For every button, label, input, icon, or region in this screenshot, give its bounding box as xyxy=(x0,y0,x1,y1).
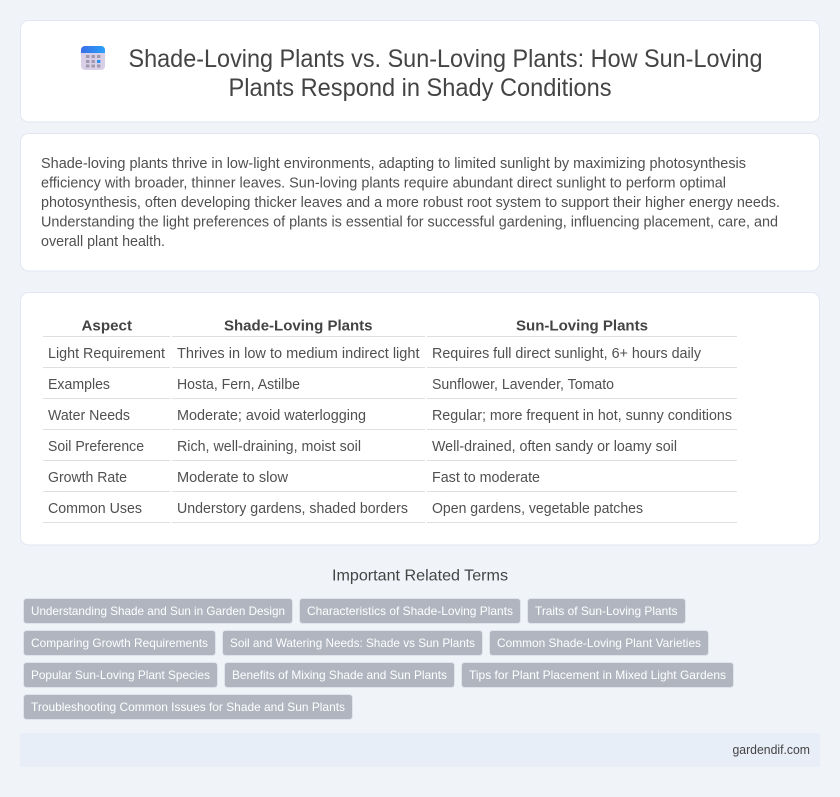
title: Plants Respond in Shady Conditions xyxy=(228,74,612,102)
tag xyxy=(24,694,352,720)
table row: examples: Hosta, Fern, Astilbe xyxy=(177,377,300,393)
tag xyxy=(490,630,708,656)
text block: intro paragraph: efficiency with broader, thinner leaves. Sun-loving plants require abundant direct sunlight to perform optimal xyxy=(41,176,726,192)
title xyxy=(128,45,762,102)
text block: intro paragraph: Shade-loving plants thrive in low-light environments, adapting to limited sunlight by maximizing photosynthesis xyxy=(41,156,746,172)
footer xyxy=(20,733,820,767)
tag xyxy=(528,598,686,624)
tag: Tips for Plant Placement in Mixed Light Gardens xyxy=(469,668,726,682)
tag list: related terms xyxy=(24,598,734,720)
table row: examples xyxy=(48,377,614,393)
table row: common uses: Common Uses xyxy=(48,501,142,517)
icon: calendar xyxy=(81,46,105,70)
table row: soil preference xyxy=(48,439,677,455)
text block: intro paragraph xyxy=(41,156,780,250)
table row: water needs: Water Needs xyxy=(48,408,130,424)
panel: title header xyxy=(20,20,820,122)
table row: water needs: Moderate; avoid waterlogging xyxy=(177,408,366,424)
tag xyxy=(462,662,734,688)
table row: water needs xyxy=(48,408,732,424)
tag xyxy=(24,630,216,656)
tag xyxy=(224,662,454,688)
footer source text: gardendif.com xyxy=(732,743,810,757)
table row: growth rate: Moderate to slow xyxy=(177,470,289,486)
table row: examples: Examples xyxy=(48,377,110,393)
table row: soil preference: Rich, well-draining, moist soil xyxy=(177,439,361,455)
tag xyxy=(300,598,520,624)
table row: soil preference: Soil Preference xyxy=(48,439,144,455)
tag xyxy=(222,630,482,656)
table row: growth rate: Growth Rate xyxy=(48,470,127,486)
tag: Characteristics of Shade-Loving Plants xyxy=(307,604,513,618)
table row: light requirement: Light Requirement xyxy=(48,346,165,362)
tag: Troubleshooting Common Issues for Shade and Sun Plants xyxy=(31,700,345,714)
text block: intro paragraph: Understanding the light preferences of plants is essential for successful gardening, influencing placement, care, and xyxy=(41,214,778,230)
heading: important related terms: Important Related Terms xyxy=(332,568,508,584)
tag: Benefits of Mixing Shade and Sun Plants xyxy=(232,668,447,682)
table row: water needs: Regular; more frequent in hot, sunny conditions xyxy=(432,408,732,424)
title: Shade-Loving Plants vs. Sun-Loving Plants: How Sun-Loving xyxy=(128,45,762,73)
table row: growth rate xyxy=(48,470,540,486)
table row: soil preference: Well-drained, often sandy or loamy soil xyxy=(432,439,677,455)
table header row: Shade-Loving Plants xyxy=(224,318,372,334)
tag: Traits of Sun-Loving Plants xyxy=(535,604,678,618)
panel: introduction xyxy=(20,134,820,271)
table row: light requirement xyxy=(48,346,702,362)
tag xyxy=(24,598,292,624)
table row: common uses: Understory gardens, shaded borders xyxy=(177,501,408,517)
table row: common uses: Open gardens, vegetable patches xyxy=(432,501,643,517)
table row: examples: Sunflower, Lavender, Tomato xyxy=(432,377,614,393)
tag: Comparing Growth Requirements xyxy=(31,636,208,650)
table header row: Aspect xyxy=(82,318,132,334)
text block: intro paragraph: overall plant health. xyxy=(41,234,165,250)
table row: growth rate: Fast to moderate xyxy=(432,470,540,486)
text block: intro paragraph: photosynthesis, often developing thicker leaves and a more robust root system to support their higher energy needs. xyxy=(41,195,780,211)
panel: comparison table xyxy=(20,292,820,545)
table row: light requirement: Thrives in low to medium indirect light xyxy=(177,346,420,362)
tag: Soil and Watering Needs: Shade vs Sun Plants xyxy=(230,636,475,650)
tag: Understanding Shade and Sun in Garden Design xyxy=(31,604,285,618)
table row: light requirement: Requires full direct sunlight, 6+ hours daily xyxy=(432,346,702,362)
table header row xyxy=(82,318,648,334)
table header row: Sun-Loving Plants xyxy=(516,318,648,334)
table row: common uses xyxy=(48,501,643,517)
tag: Common Shade-Loving Plant Varieties xyxy=(497,636,701,650)
tag xyxy=(24,662,218,688)
tag: Popular Sun-Loving Plant Species xyxy=(31,668,210,682)
